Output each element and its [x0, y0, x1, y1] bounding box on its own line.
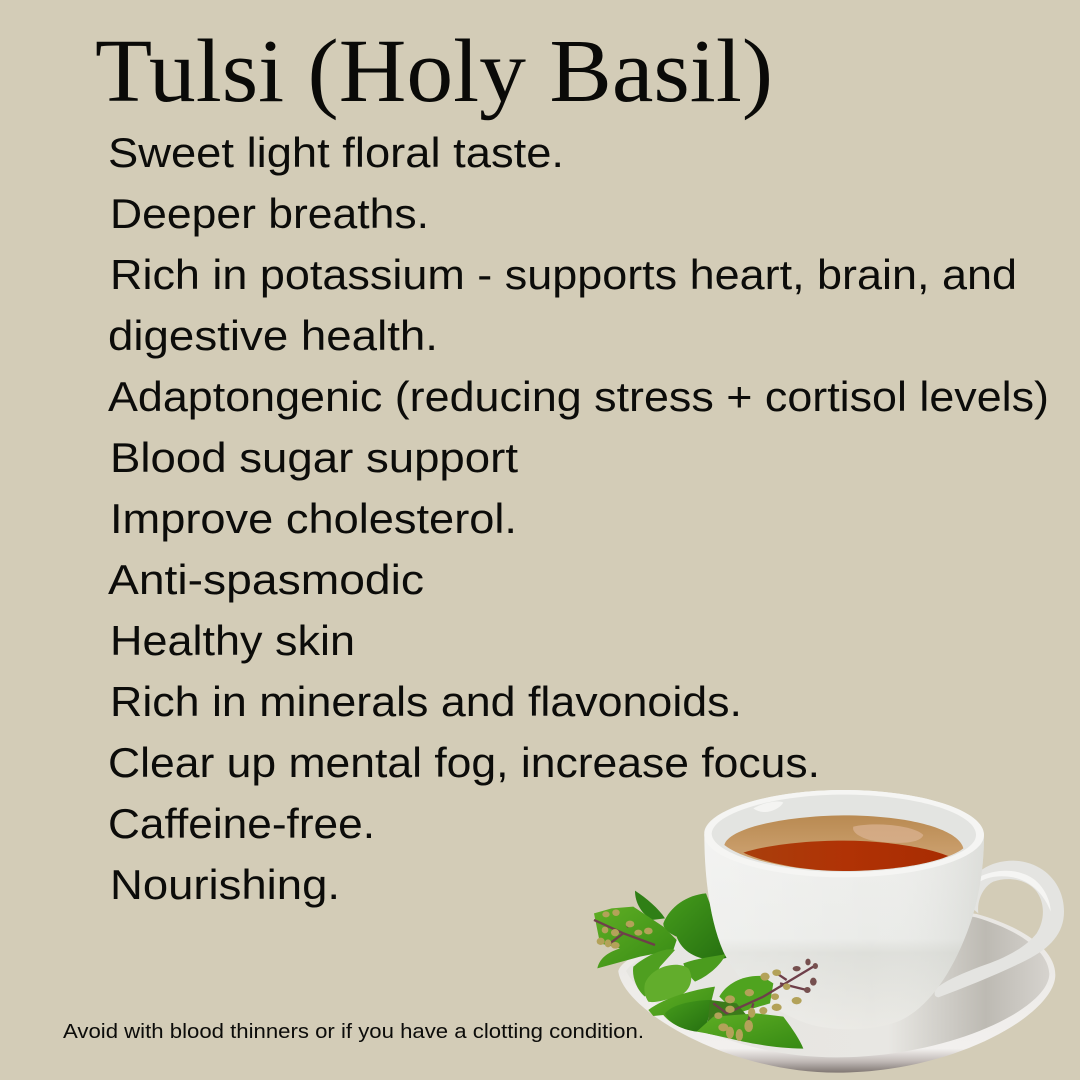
- benefits list: Anti-spasmodic: [108, 556, 424, 603]
- tea: [724, 815, 963, 871]
- benefits list: digestive health.: [108, 312, 438, 359]
- cup handle: [935, 861, 1064, 997]
- benefits list: [108, 129, 1049, 908]
- tulsi flower sprigs: [594, 909, 818, 1041]
- benefits list: Clear up mental fog, increase focus.: [108, 739, 820, 786]
- benefits list: Improve cholesterol.: [110, 495, 517, 542]
- benefits list: Rich in potassium - supports heart, brain, and: [110, 251, 1017, 298]
- title: Tulsi (Holy Basil): [95, 22, 773, 121]
- handle highlight: [980, 871, 1051, 912]
- illustration: tea cup with tulsi leaves: [594, 790, 1064, 1073]
- benefits list: Sweet light floral taste.: [108, 129, 564, 176]
- saucer: [618, 912, 1055, 1073]
- benefits list: Rich in minerals and flavonoids.: [110, 678, 742, 725]
- benefits list: Blood sugar support: [110, 434, 518, 481]
- cup rim: [704, 790, 984, 877]
- benefits list: Caffeine-free.: [108, 800, 375, 847]
- benefits list: Healthy skin: [110, 617, 355, 664]
- footer caution note: Avoid with blood thinners or if you have a clotting condition.: [63, 1021, 644, 1043]
- benefits list: Deeper breaths.: [110, 190, 429, 237]
- rim highlight: [753, 801, 783, 812]
- benefits list: Adaptongenic (reducing stress + cortisol levels): [108, 373, 1049, 420]
- benefits list: Nourishing.: [110, 861, 340, 908]
- front leaves: [644, 965, 803, 1049]
- cup body: [704, 790, 984, 1029]
- back leaves: [594, 891, 730, 997]
